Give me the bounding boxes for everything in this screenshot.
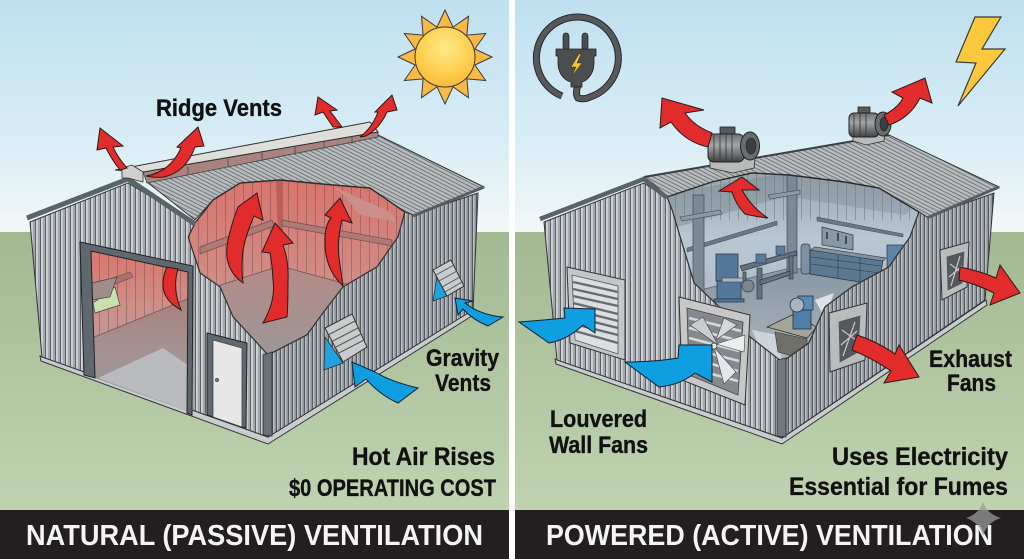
white light patches	[752, 330, 782, 359]
icon: sun	[398, 10, 492, 104]
blue cabinet	[887, 245, 903, 267]
roof fan motor: rear	[849, 107, 891, 145]
corner trim	[263, 352, 272, 436]
roof	[147, 135, 484, 220]
right eave trim	[413, 187, 484, 216]
icon: electric plug	[536, 17, 618, 99]
label: Hot Air Rises: Hot Air Rises	[352, 443, 495, 471]
label: Essential for Fumes: Essential for Fumes	[789, 473, 1008, 501]
gas cylinder	[801, 244, 810, 274]
pegboard	[822, 227, 853, 250]
front gable wall	[30, 183, 268, 437]
gravity vent: front	[324, 314, 367, 370]
building: powered ventilation shed	[540, 135, 999, 444]
title band: natural	[0, 510, 509, 559]
building: natural ventilation shed	[27, 122, 484, 444]
exhaust fan: front	[829, 303, 867, 372]
label: Exhaust Fans: Fans	[947, 370, 996, 397]
foundation	[555, 300, 987, 444]
panel: natural ventilation background	[0, 0, 509, 511]
right side wall	[782, 193, 994, 438]
label: Ridge Vents: Ridge Vents	[156, 95, 282, 122]
title band: natural: NATURAL (PASSIVE) VENTILATION	[26, 520, 483, 552]
grinder on table	[767, 315, 817, 338]
label: Gravity Vents: Gravity	[426, 345, 500, 372]
arrows: hot air rising	[97, 95, 397, 323]
label: Uses Electricity: Uses Electricity	[832, 443, 1008, 471]
watermark star	[966, 502, 1001, 536]
interior cutaway hot air	[188, 180, 404, 353]
exhaust fan: rear	[940, 242, 969, 300]
workbench	[740, 251, 797, 299]
arrows: powered intake	[519, 308, 712, 387]
arrows: cool air entering gravity vents	[352, 298, 503, 403]
ridge vent	[115, 122, 378, 183]
gable fascia	[540, 179, 667, 219]
tool chest	[810, 250, 883, 285]
label: $0 operating cost: $0 OPERATING COST	[289, 475, 496, 502]
gravity vent: rear	[433, 260, 464, 301]
floor	[704, 268, 859, 343]
arrows: powered exhaust	[660, 78, 1020, 383]
right eave trim	[927, 187, 999, 218]
interior workshop	[668, 174, 918, 359]
roof	[644, 135, 999, 217]
front gable wall	[544, 183, 782, 438]
label: Gravity Vents	[426, 345, 500, 397]
louvered wall fan	[567, 267, 625, 360]
door opening	[80, 242, 193, 420]
roof fan motor: front	[708, 127, 760, 173]
columns	[693, 195, 704, 292]
corner trim	[777, 358, 786, 437]
label: Gravity Vents: Vents	[435, 370, 491, 397]
large wall fan	[679, 297, 750, 405]
man door	[207, 333, 247, 428]
right side wall	[268, 193, 478, 437]
icon: lightning bolt	[956, 17, 1005, 106]
label: Louvered Wall Fans	[549, 406, 648, 459]
girts	[687, 221, 777, 252]
band saw	[714, 254, 744, 302]
label: Exhaust Fans: Exhaust	[929, 346, 1012, 373]
title band: powered: POWERED (ACTIVE) VENTILATION	[546, 520, 993, 552]
foundation	[40, 309, 475, 444]
label: Louvered Wall Fans: Wall Fans	[549, 432, 648, 459]
gable fascia	[27, 179, 195, 224]
label: Louvered Wall Fans: Louvered	[550, 406, 647, 433]
panel: powered ventilation background	[515, 0, 1024, 511]
label: Exhaust Fans	[929, 346, 1012, 397]
title band: powered	[515, 510, 1024, 559]
